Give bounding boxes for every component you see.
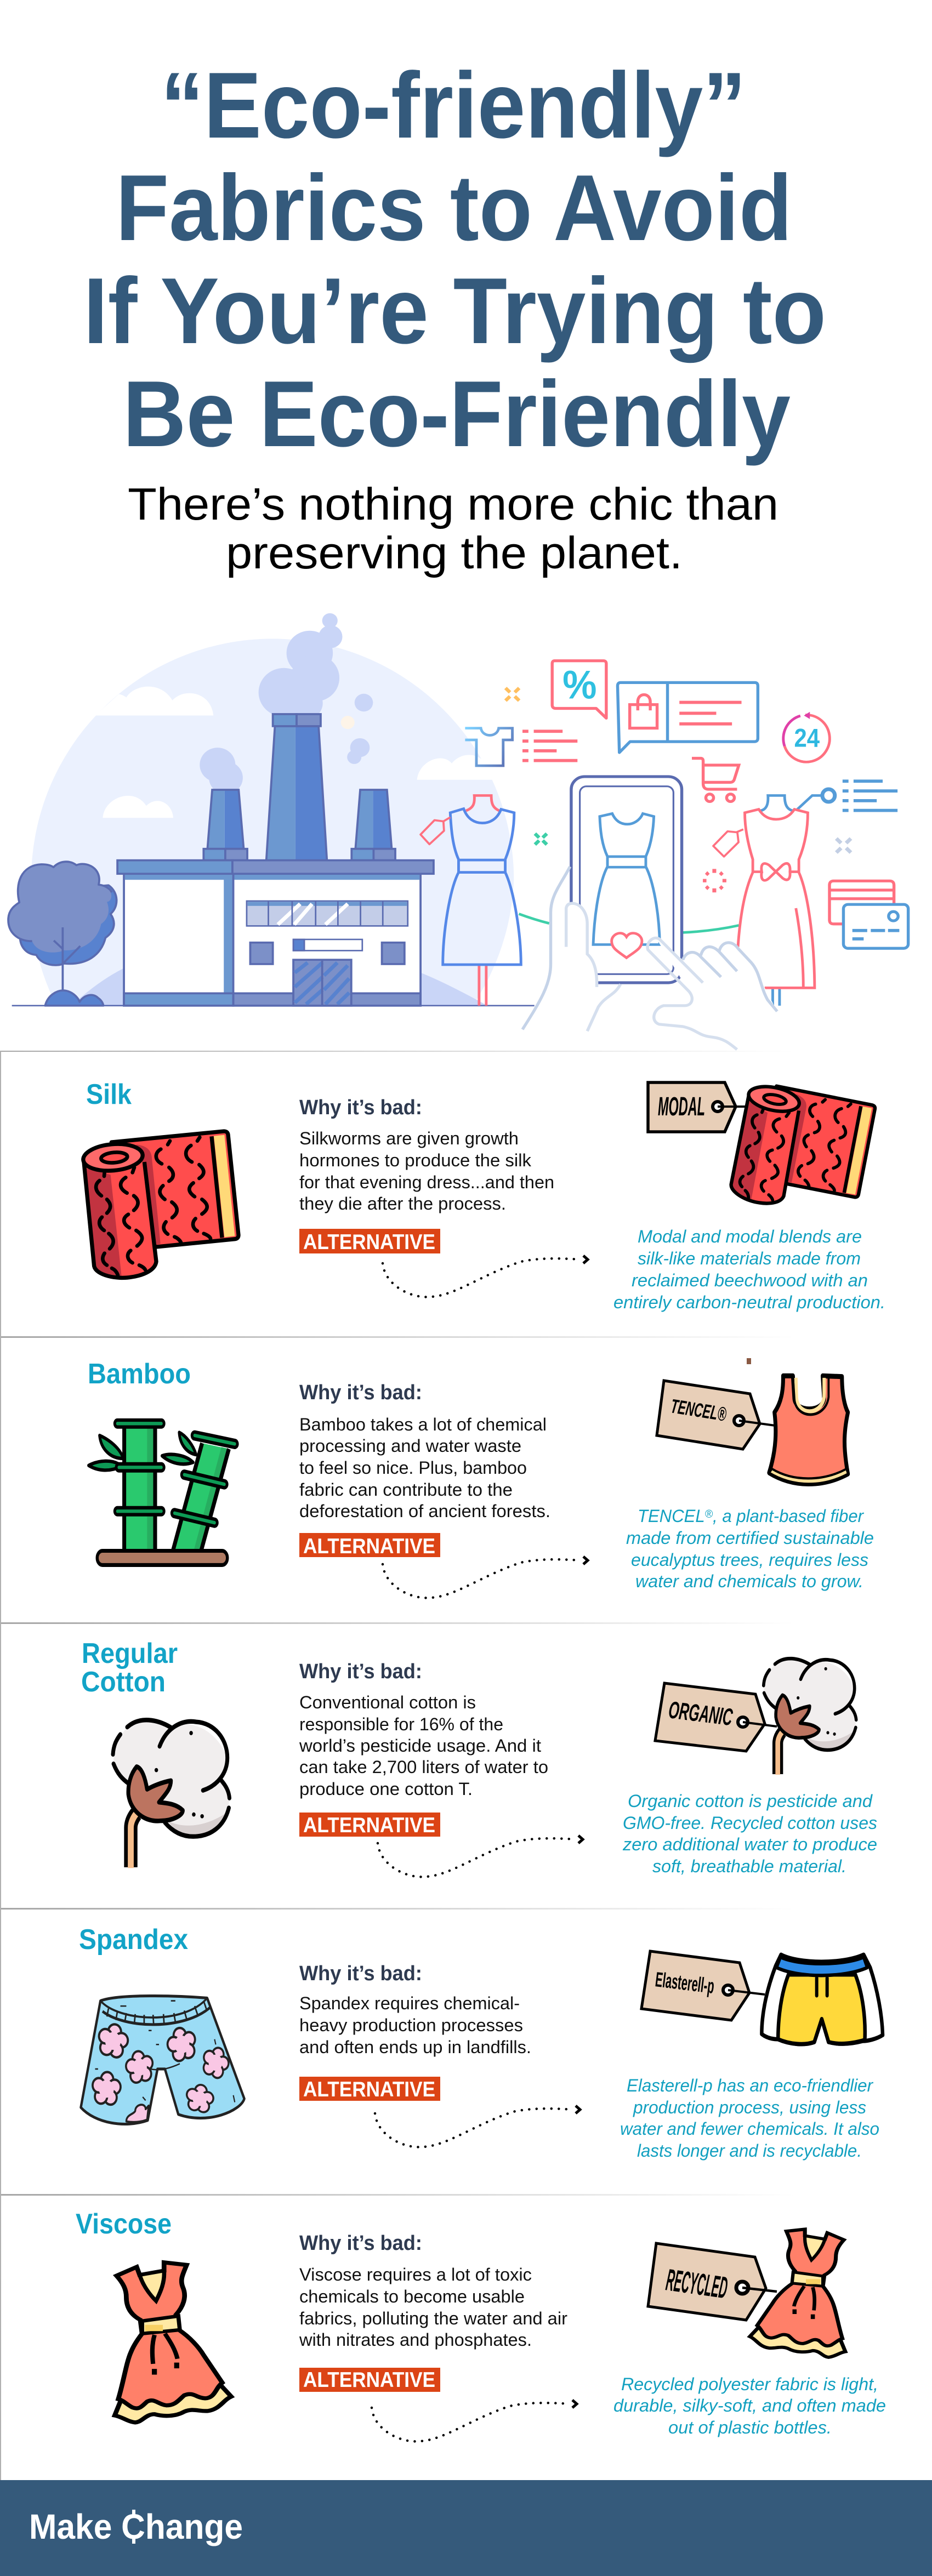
clouds	[95, 687, 493, 818]
alternative text: silk-like materials made from	[638, 1249, 861, 1268]
icon: cotton	[113, 1720, 230, 1868]
footer	[0, 2480, 932, 2576]
why it's bad text: for that evening dress...and then	[299, 1172, 554, 1192]
why it's bad text	[299, 1129, 554, 1213]
alternative text: made from certified sustainable	[626, 1528, 874, 1548]
icon: silk roll	[82, 1131, 238, 1278]
tree	[8, 862, 117, 1006]
spandex heading: Spandex	[79, 1924, 188, 1956]
ground line	[12, 1004, 535, 1007]
alternative text	[620, 2076, 879, 2161]
title: Be Eco-Friendly	[123, 362, 791, 466]
title: Fabrics to Avoid	[116, 156, 792, 260]
elasterell tag: Elasterell-p	[654, 1968, 715, 1998]
dotted arrow	[375, 2106, 580, 2147]
why it's bad text: Viscose requires a lot of toxic	[299, 2265, 532, 2284]
t-shirt icon	[465, 728, 513, 766]
recycled tag: RECYCLED	[664, 2262, 730, 2305]
alternative badge: ALTERNATIVE	[303, 1230, 435, 1254]
cotton heading	[81, 1638, 178, 1698]
icon: modal fabric roll	[718, 1070, 884, 1230]
why it's bad text: chemicals to become usable	[299, 2287, 525, 2306]
why it's bad text: processing and water waste	[299, 1436, 521, 1456]
why it's bad text: hormones to produce the silk	[299, 1150, 532, 1170]
alternative badge: ALTERNATIVE	[303, 1535, 435, 1558]
hero illustration: online shopping scene	[420, 661, 908, 1050]
why it's bad text: Silkworms are given growth	[299, 1129, 519, 1148]
title: If You’re Trying to	[83, 259, 826, 363]
why it's bad text	[299, 1692, 548, 1799]
why it's bad heading: Why it’s bad:	[299, 2232, 422, 2255]
background circle	[31, 639, 514, 1006]
icon: floral shorts	[81, 1996, 245, 2124]
why it's bad heading: Why it’s bad:	[299, 1660, 422, 1683]
alternative text: soft, breathable material.	[652, 1856, 846, 1876]
elasterell tag	[641, 1951, 765, 2020]
why it's bad text	[299, 1415, 550, 1521]
discount bubble: %	[562, 663, 597, 707]
why it's bad text: Conventional cotton is	[299, 1692, 476, 1712]
why it's bad heading: Why it’s bad:	[299, 1096, 422, 1119]
cart	[692, 758, 739, 801]
subtitle	[128, 478, 778, 578]
hero illustration: factory scene	[8, 613, 535, 1006]
panel: spandex	[79, 1924, 883, 2161]
dotted arrow	[383, 1256, 588, 1297]
subtitle: There’s nothing more chic than	[128, 478, 778, 529]
alternative text: Organic cotton is pesticide and	[628, 1791, 873, 1811]
why it's bad text: Bamboo takes a lot of chemical	[299, 1415, 547, 1434]
tencel tag: TENCEL®	[669, 1394, 728, 1426]
why it's bad text: fabric can contribute to the	[299, 1480, 513, 1500]
subtitle: preserving the planet.	[226, 527, 683, 578]
panel: viscose	[76, 2208, 886, 2441]
hand right	[647, 938, 777, 1050]
mannequin dress blue	[420, 795, 521, 1006]
why it's bad text: they die after the process.	[299, 1194, 506, 1213]
shopping bag bubble	[617, 682, 758, 753]
dotted arrow	[372, 2400, 577, 2441]
alternative text	[626, 1506, 874, 1591]
alternative text: lasts longer and is recyclable.	[637, 2141, 862, 2161]
alternative text: Modal and modal blends are	[638, 1227, 862, 1246]
tencel tag	[657, 1381, 775, 1449]
why it's bad text: fabrics, polluting the water and air	[299, 2309, 567, 2328]
bamboo heading: Bamboo	[88, 1358, 191, 1390]
icon: yellow shorts	[761, 1954, 883, 2044]
alternative text: out of plastic bottles.	[668, 2418, 832, 2437]
alternative text	[613, 2374, 886, 2437]
why it's bad text: responsible for 16% of the	[299, 1714, 503, 1734]
icon: tank top	[769, 1376, 848, 1484]
icon: organic cotton	[764, 1659, 856, 1775]
alternative text: water and fewer chemicals. It also	[620, 2119, 879, 2139]
alternative text: eucalyptus trees, requires less	[631, 1550, 868, 1570]
title	[83, 53, 826, 466]
why it's bad text: produce one cotton T.	[299, 1779, 473, 1799]
why it's bad text	[299, 1993, 531, 2057]
factory	[117, 714, 434, 1006]
why it's bad text: can take 2,700 liters of water to	[299, 1757, 548, 1777]
24 hour clock	[783, 712, 829, 762]
logo: Make Change: Make Change	[29, 2507, 243, 2546]
hill	[71, 968, 487, 1006]
alternative text	[622, 1791, 877, 1876]
stray speck	[747, 1358, 751, 1364]
modal tag: MODAL	[658, 1092, 705, 1121]
why it's bad text: Spandex requires chemical-	[299, 1993, 520, 2013]
recycled tag	[648, 2243, 777, 2320]
why it's bad heading: Why it’s bad:	[299, 1962, 422, 1985]
discount bubble	[552, 661, 606, 718]
dotted arrow	[378, 1836, 583, 1877]
alternative text: TENCEL	[638, 1506, 707, 1526]
alternative text: GMO-free. Recycled cotton uses	[623, 1813, 877, 1833]
organic tag	[655, 1683, 777, 1751]
alternative badge: ALTERNATIVE	[303, 2368, 435, 2392]
coral list	[522, 731, 577, 761]
why it's bad heading: Why it’s bad:	[299, 1381, 422, 1404]
sparkles	[505, 688, 851, 853]
panel: bamboo	[88, 1358, 874, 1598]
credit cards	[829, 881, 908, 948]
24 hour clock: 24	[794, 724, 820, 753]
alternative text: durable, silky-soft, and often made	[613, 2396, 886, 2415]
alternative text: entirely carbon-neutral production.	[613, 1292, 885, 1312]
why it's bad text: deforestation of ancient forests.	[299, 1501, 550, 1521]
cotton heading: Regular	[82, 1638, 178, 1669]
panel: regular cotton	[81, 1638, 877, 1877]
why it's bad text: world’s pesticide usage. And it	[299, 1736, 541, 1756]
icon: dress	[115, 2262, 231, 2423]
dotted arrow	[383, 1557, 588, 1598]
alternative text: water and chemicals to grow.	[635, 1571, 863, 1591]
alternative text: zero additional water to produce	[622, 1834, 877, 1854]
silk heading: Silk	[86, 1079, 132, 1110]
icon: bamboo	[89, 1423, 235, 1565]
modal tag	[648, 1082, 748, 1132]
why it's bad text: and often ends up in landfills.	[299, 2037, 531, 2057]
viscose heading: Viscose	[76, 2208, 172, 2240]
cotton heading: Cotton	[81, 1666, 166, 1698]
panel: silk	[82, 1070, 885, 1312]
alternative badge: ALTERNATIVE	[303, 2078, 435, 2101]
phone	[571, 777, 682, 983]
green path	[519, 914, 739, 932]
panel dividers and frame	[0, 1051, 795, 2480]
hand left	[522, 867, 621, 1031]
alternative text: reclaimed beechwood with an	[632, 1270, 868, 1290]
alternative badge: ALTERNATIVE	[303, 1814, 435, 1837]
icon: recycled dress	[750, 2229, 845, 2357]
alternative text: production process, using less	[633, 2098, 866, 2117]
title: “Eco-friendly”	[161, 53, 746, 158]
why it's bad text: heavy production processes	[299, 2015, 523, 2035]
why it's bad text: with nitrates and phosphates.	[299, 2330, 532, 2350]
alternative text: , a plant-based fiber	[713, 1506, 864, 1526]
dotted circle	[703, 869, 726, 892]
alternative text: Recycled polyester fabric is light,	[621, 2374, 878, 2394]
mannequin dress coral	[713, 781, 897, 1006]
alternative text: ®	[705, 1508, 713, 1520]
alternative text: Elasterell-p has an eco-friendlier	[627, 2076, 873, 2095]
alternative text	[613, 1227, 885, 1312]
organic tag: ORGANIC	[667, 1696, 735, 1731]
smoke	[200, 613, 373, 794]
why it's bad text	[299, 2265, 567, 2350]
why it's bad text: to feel so nice. Plus, bamboo	[299, 1458, 527, 1478]
